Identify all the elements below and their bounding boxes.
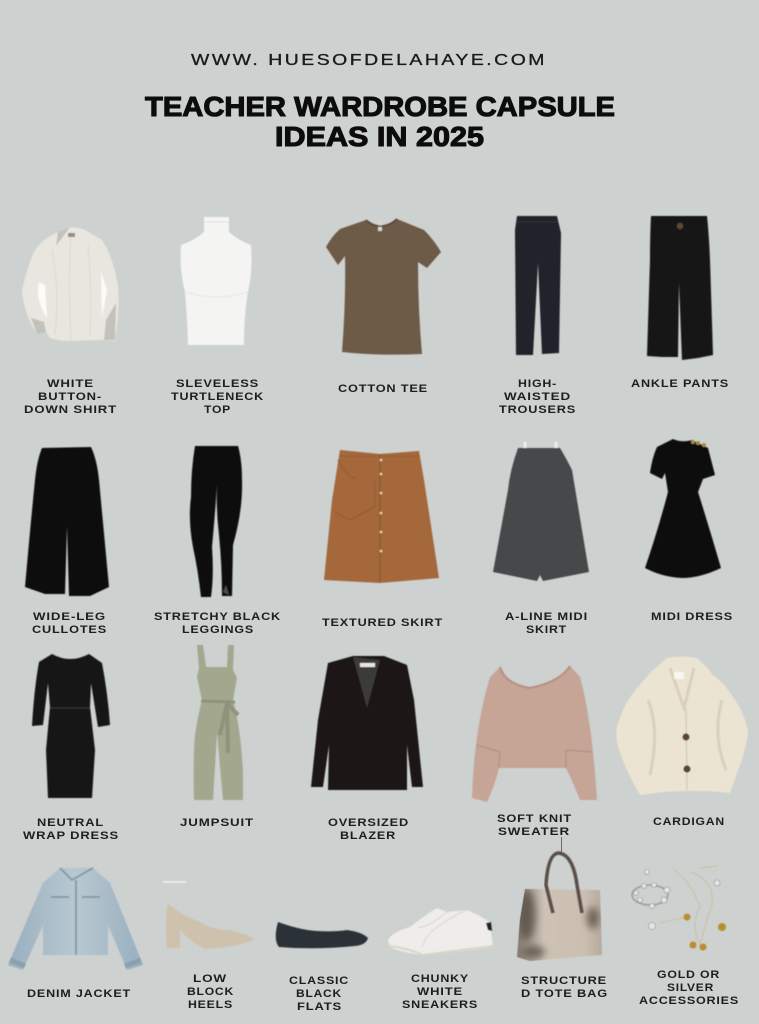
title: [145, 91, 615, 152]
label: [639, 969, 739, 1007]
item: sleeveless turtleneck top: [171, 217, 264, 416]
icon: shirt: [22, 227, 119, 341]
label: TURTLENECK: [171, 391, 264, 403]
item: structured tote bag: [517, 837, 608, 1000]
label: WIDE-LEG: [33, 611, 106, 623]
label: TOP: [204, 404, 231, 416]
label: DOWN SHIRT: [24, 404, 117, 416]
label: GOLD OR: [657, 969, 720, 981]
item: neutral wrap dress: [23, 654, 119, 842]
icon: turtleneck: [180, 217, 252, 345]
icon: cardigan: [616, 656, 748, 795]
item: chunky white sneakers: [388, 908, 493, 1011]
label: BLACK: [296, 988, 342, 1000]
item: ankle pants: [631, 216, 729, 390]
icon: a-line skirt: [493, 442, 589, 581]
icon: sweater: [472, 666, 597, 802]
item: cotton tee: [326, 219, 441, 395]
label: SKIRT: [526, 624, 567, 636]
item: wide-leg culottes: [25, 447, 109, 636]
item: stretchy black leggings: [154, 446, 281, 636]
icon: denim jacket: [8, 868, 143, 970]
icon: tote bag: [517, 837, 602, 961]
label: NEUTRAL: [37, 817, 104, 829]
label: CLASSIC: [289, 975, 349, 987]
label: CHUNKY: [411, 973, 469, 985]
label: [497, 813, 572, 838]
label: MIDI DRESS: [651, 611, 733, 623]
label: BLAZER: [340, 830, 396, 842]
label: D TOTE BAG: [521, 988, 608, 1000]
icon: midi dress: [645, 439, 721, 578]
label: [328, 817, 409, 842]
title: IDEAS IN 2025: [275, 121, 484, 152]
label: STRETCHY BLACK: [154, 611, 281, 623]
label: [289, 975, 349, 1013]
item: cardigan: [616, 656, 748, 828]
label: WRAP DRESS: [23, 830, 119, 842]
item: textured skirt: [322, 450, 443, 629]
item: oversized blazer: [311, 656, 423, 842]
item: a-line midi skirt: [493, 442, 589, 636]
icon: sneakers: [388, 908, 493, 955]
label: JUMPSUIT: [180, 817, 254, 829]
icon: ankle pants: [647, 216, 713, 360]
icon: blazer: [311, 656, 423, 790]
label: HIGH-: [518, 378, 557, 390]
label: WAISTED: [504, 391, 571, 403]
item: white button-down shirt: [22, 227, 119, 416]
label: ACCESSORIES: [639, 995, 739, 1007]
icon: leggings: [190, 446, 242, 597]
label: LOW: [193, 973, 227, 985]
label: SOFT KNIT: [497, 813, 572, 825]
label: CARDIGAN: [653, 816, 725, 828]
label: CULLOTES: [32, 624, 107, 636]
label: COTTON TEE: [338, 383, 428, 395]
label: SWEATER: [498, 826, 570, 838]
label: A-LINE MIDI: [505, 611, 588, 623]
item: classic black flats: [276, 922, 368, 1013]
icon: trousers: [515, 216, 561, 355]
item: denim jacket: [8, 868, 143, 1000]
label: SILVER: [667, 982, 714, 994]
label: BLOCK: [187, 986, 234, 998]
item: high-waisted trousers: [499, 216, 576, 416]
item: soft knit sweater: [472, 666, 597, 838]
label: HEELS: [188, 999, 233, 1011]
label: OVERSIZED: [328, 817, 409, 829]
label: SLEVELESS: [176, 378, 259, 390]
label: DENIM JACKET: [27, 988, 131, 1000]
item: jumpsuit: [180, 645, 254, 829]
icon: tee: [326, 219, 441, 355]
icon: culottes: [25, 447, 109, 596]
item: midi dress: [645, 439, 733, 623]
icon: flats: [276, 922, 368, 948]
label: TROUSERS: [499, 404, 576, 416]
icon: jumpsuit: [194, 645, 243, 800]
label: [187, 973, 234, 1011]
label: [402, 973, 478, 1011]
icon: corduroy skirt: [324, 450, 439, 583]
label: [23, 817, 119, 842]
label: [154, 611, 281, 636]
label: ANKLE PANTS: [631, 378, 729, 390]
label: FLATS: [297, 1001, 342, 1013]
label: BUTTON-: [38, 391, 102, 403]
label: [505, 611, 588, 636]
label: [171, 378, 264, 416]
icon: heels: [163, 882, 255, 949]
label: STRUCTURE: [521, 975, 607, 987]
label: [32, 611, 107, 636]
label: [499, 378, 576, 416]
label: [521, 975, 608, 1000]
label: SNEAKERS: [402, 999, 478, 1011]
label: WHITE: [47, 378, 94, 390]
item: gold or silver accessories: [632, 866, 739, 1007]
website url: WWW. HUESOFDELAHAYE.COM: [191, 52, 547, 69]
label: LEGGINGS: [182, 624, 254, 636]
icon: jewellery: [632, 866, 726, 950]
label: WHITE: [417, 986, 463, 998]
label: [24, 378, 117, 416]
title: TEACHER WARDROBE CAPSULE: [145, 91, 615, 122]
item: low block heels: [163, 882, 255, 1011]
icon: wrap dress: [32, 654, 110, 798]
label: TEXTURED SKIRT: [322, 617, 443, 629]
